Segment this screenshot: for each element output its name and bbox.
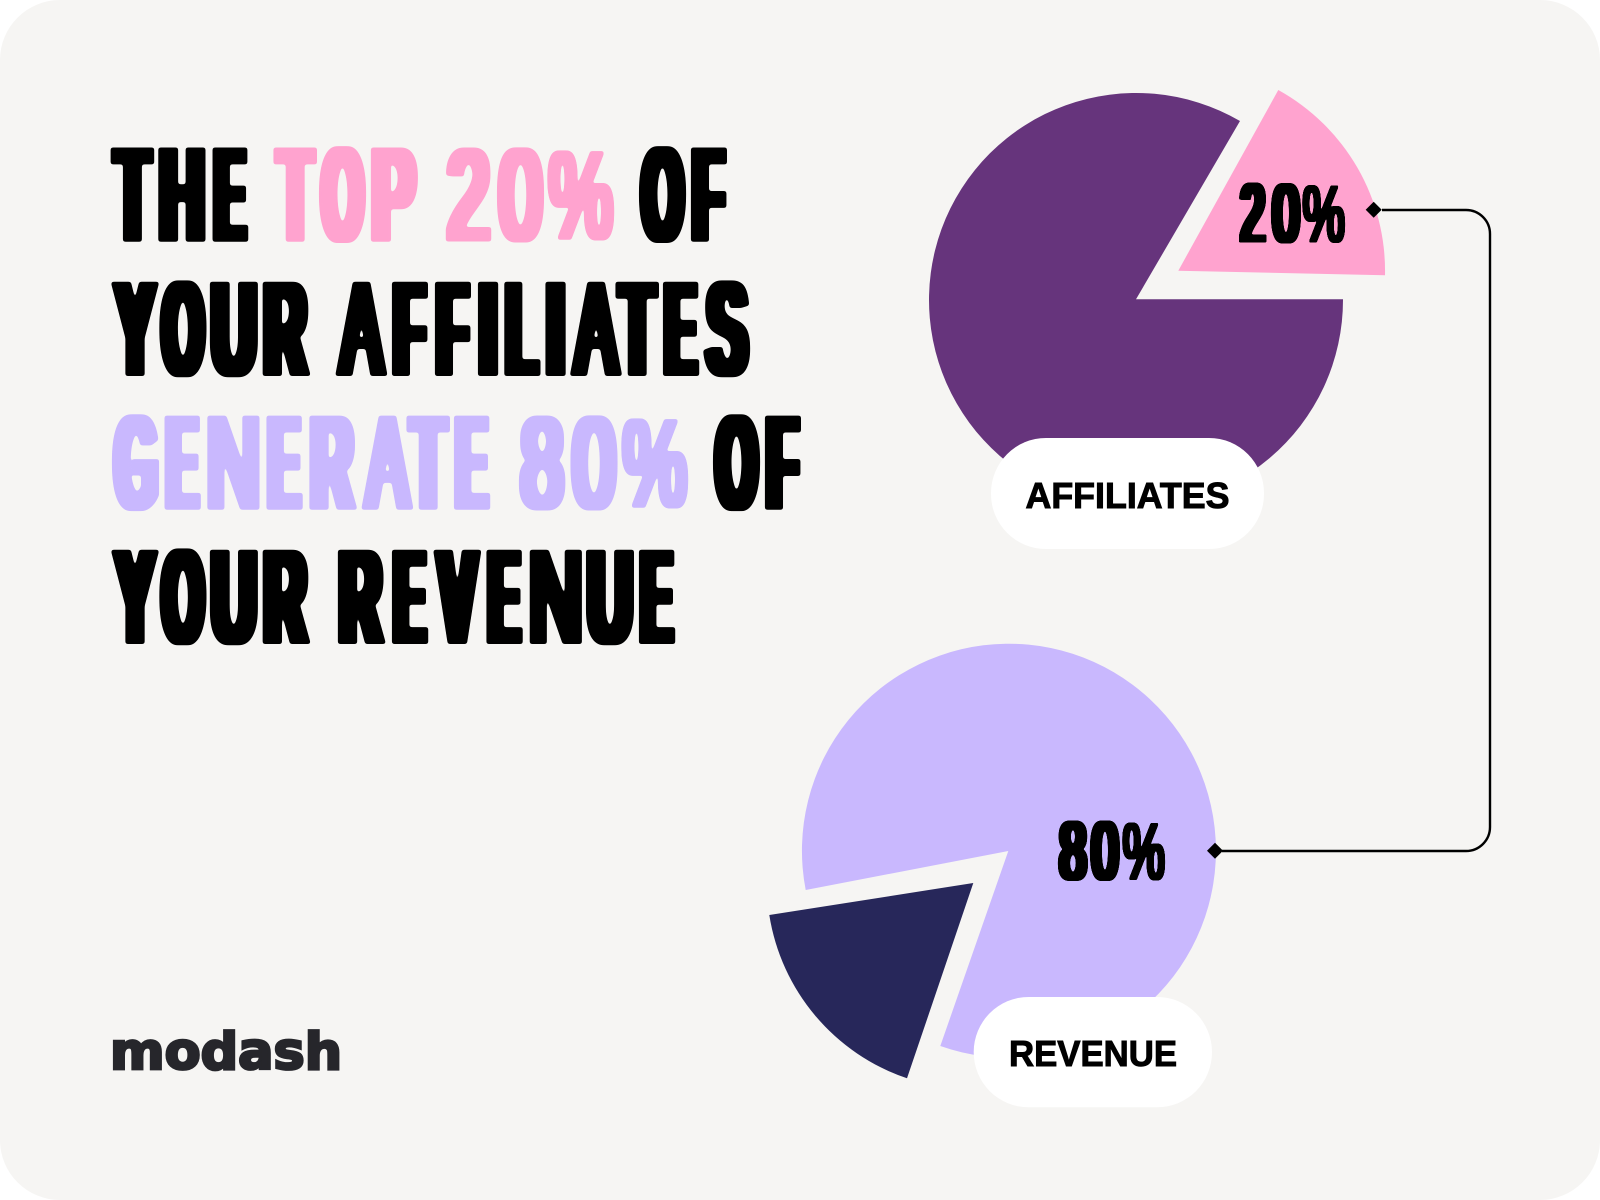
line 3: generate 80% of: N: [207, 389, 260, 538]
title: [115, 121, 797, 672]
connector line between the slices: [1222, 210, 1490, 851]
value: 20%: %: [1302, 170, 1345, 258]
line 3: generate 80% of: R: [311, 389, 353, 538]
line 1: the top 20% of: E: [215, 121, 244, 270]
line 1: the top 20% of: O: [322, 121, 363, 270]
line 3: generate 80% of: [115, 389, 797, 538]
line 3: generate 80% of: %: [623, 396, 687, 534]
title: F: [693, 121, 723, 270]
line 2: your affiliates: [116, 255, 747, 404]
line 1: the top 20% of: 0: [500, 124, 542, 266]
line 2: your affiliates: I: [479, 255, 497, 404]
value: 80%: %: [1122, 807, 1165, 896]
slice: remaining 80% of affiliates: [929, 93, 1343, 507]
line 1: the top 20% of: H: [160, 121, 204, 270]
line 2: your affiliates: I: [547, 255, 564, 404]
pill label: affiliates: [991, 438, 1264, 549]
line 4: your revenue: Y: [116, 523, 154, 672]
pie chart: revenue: [769, 644, 1216, 1107]
line 3: generate 80% of: G: [115, 389, 157, 538]
line 3: generate 80% of: 8: [521, 392, 563, 534]
line 1: the top 20% of: T: [116, 121, 149, 270]
pill label: revenue: REVENUE: [1009, 1033, 1177, 1074]
line 1: the top 20% of: 2: [448, 124, 490, 266]
slice: 80% of revenue: [802, 644, 1216, 1058]
line 1: the top 20% of: T: [278, 121, 312, 270]
connector marker: top diamond: [1366, 202, 1382, 218]
line 2: your affiliates: U: [212, 255, 256, 404]
line 1: the top 20% of: %: [549, 128, 613, 266]
line 3: generate 80% of: 0: [573, 392, 615, 534]
line 2: your affiliates: E: [665, 255, 696, 404]
line 3: generate 80% of: E: [167, 389, 197, 538]
title: E: [641, 523, 672, 672]
line 3: generate 80% of: E: [269, 389, 299, 538]
value: 80%: [1060, 804, 1165, 897]
line 4: your revenue: O: [163, 523, 203, 672]
slice: remaining 20% of revenue: [769, 883, 973, 1078]
pill label: revenue: [974, 997, 1212, 1107]
pie chart: affiliates: [929, 90, 1385, 549]
line 4: your revenue: E: [394, 523, 424, 672]
line 4: your revenue: V: [438, 523, 476, 672]
line 4: your revenue: N: [529, 523, 582, 672]
line 3: generate 80% of: T: [411, 389, 445, 538]
line 4: your revenue: U: [212, 523, 256, 672]
line 1: the top 20% of: P: [372, 121, 415, 270]
line 2: your affiliates: F: [394, 255, 424, 404]
line 3: generate 80% of: A: [367, 389, 408, 538]
line 4: your revenue: R: [264, 523, 306, 672]
line 2: your affiliates: F: [437, 255, 467, 404]
line 2: your affiliates: L: [506, 255, 536, 404]
value: 80%: 0: [1092, 804, 1118, 897]
line 2: your affiliates: A: [576, 255, 617, 404]
text: F: [767, 389, 797, 538]
slice: top 20% of affiliates: [1178, 90, 1385, 275]
line 2: your affiliates: R: [264, 255, 306, 404]
value: 20%: 0: [1273, 166, 1299, 260]
line 2: your affiliates: O: [163, 255, 203, 404]
line 1: the top 20% of: O: [642, 121, 683, 270]
line 4: your revenue: [116, 523, 671, 672]
line 1: the top 20% of: [116, 121, 723, 270]
value: 20%: 2: [1241, 166, 1265, 260]
line 2: your affiliates: Y: [116, 255, 154, 404]
line 4: your revenue: E: [489, 523, 519, 672]
title: S: [707, 255, 747, 404]
line 3: generate 80% of: E: [456, 389, 486, 538]
line 4: your revenue: U: [588, 523, 632, 672]
pill label: affiliates: AFFILIATES: [1026, 475, 1230, 516]
line 4: your revenue: R: [340, 523, 381, 672]
line 2: your affiliates: T: [620, 255, 654, 404]
logo: modash: modash: [110, 1023, 342, 1082]
line 2: your affiliates: A: [341, 255, 382, 404]
connector marker: bottom diamond: [1207, 843, 1223, 859]
value: 80%: 8: [1060, 804, 1086, 897]
line 3: generate 80% of: O: [716, 389, 757, 538]
value: 20%: [1241, 166, 1345, 260]
